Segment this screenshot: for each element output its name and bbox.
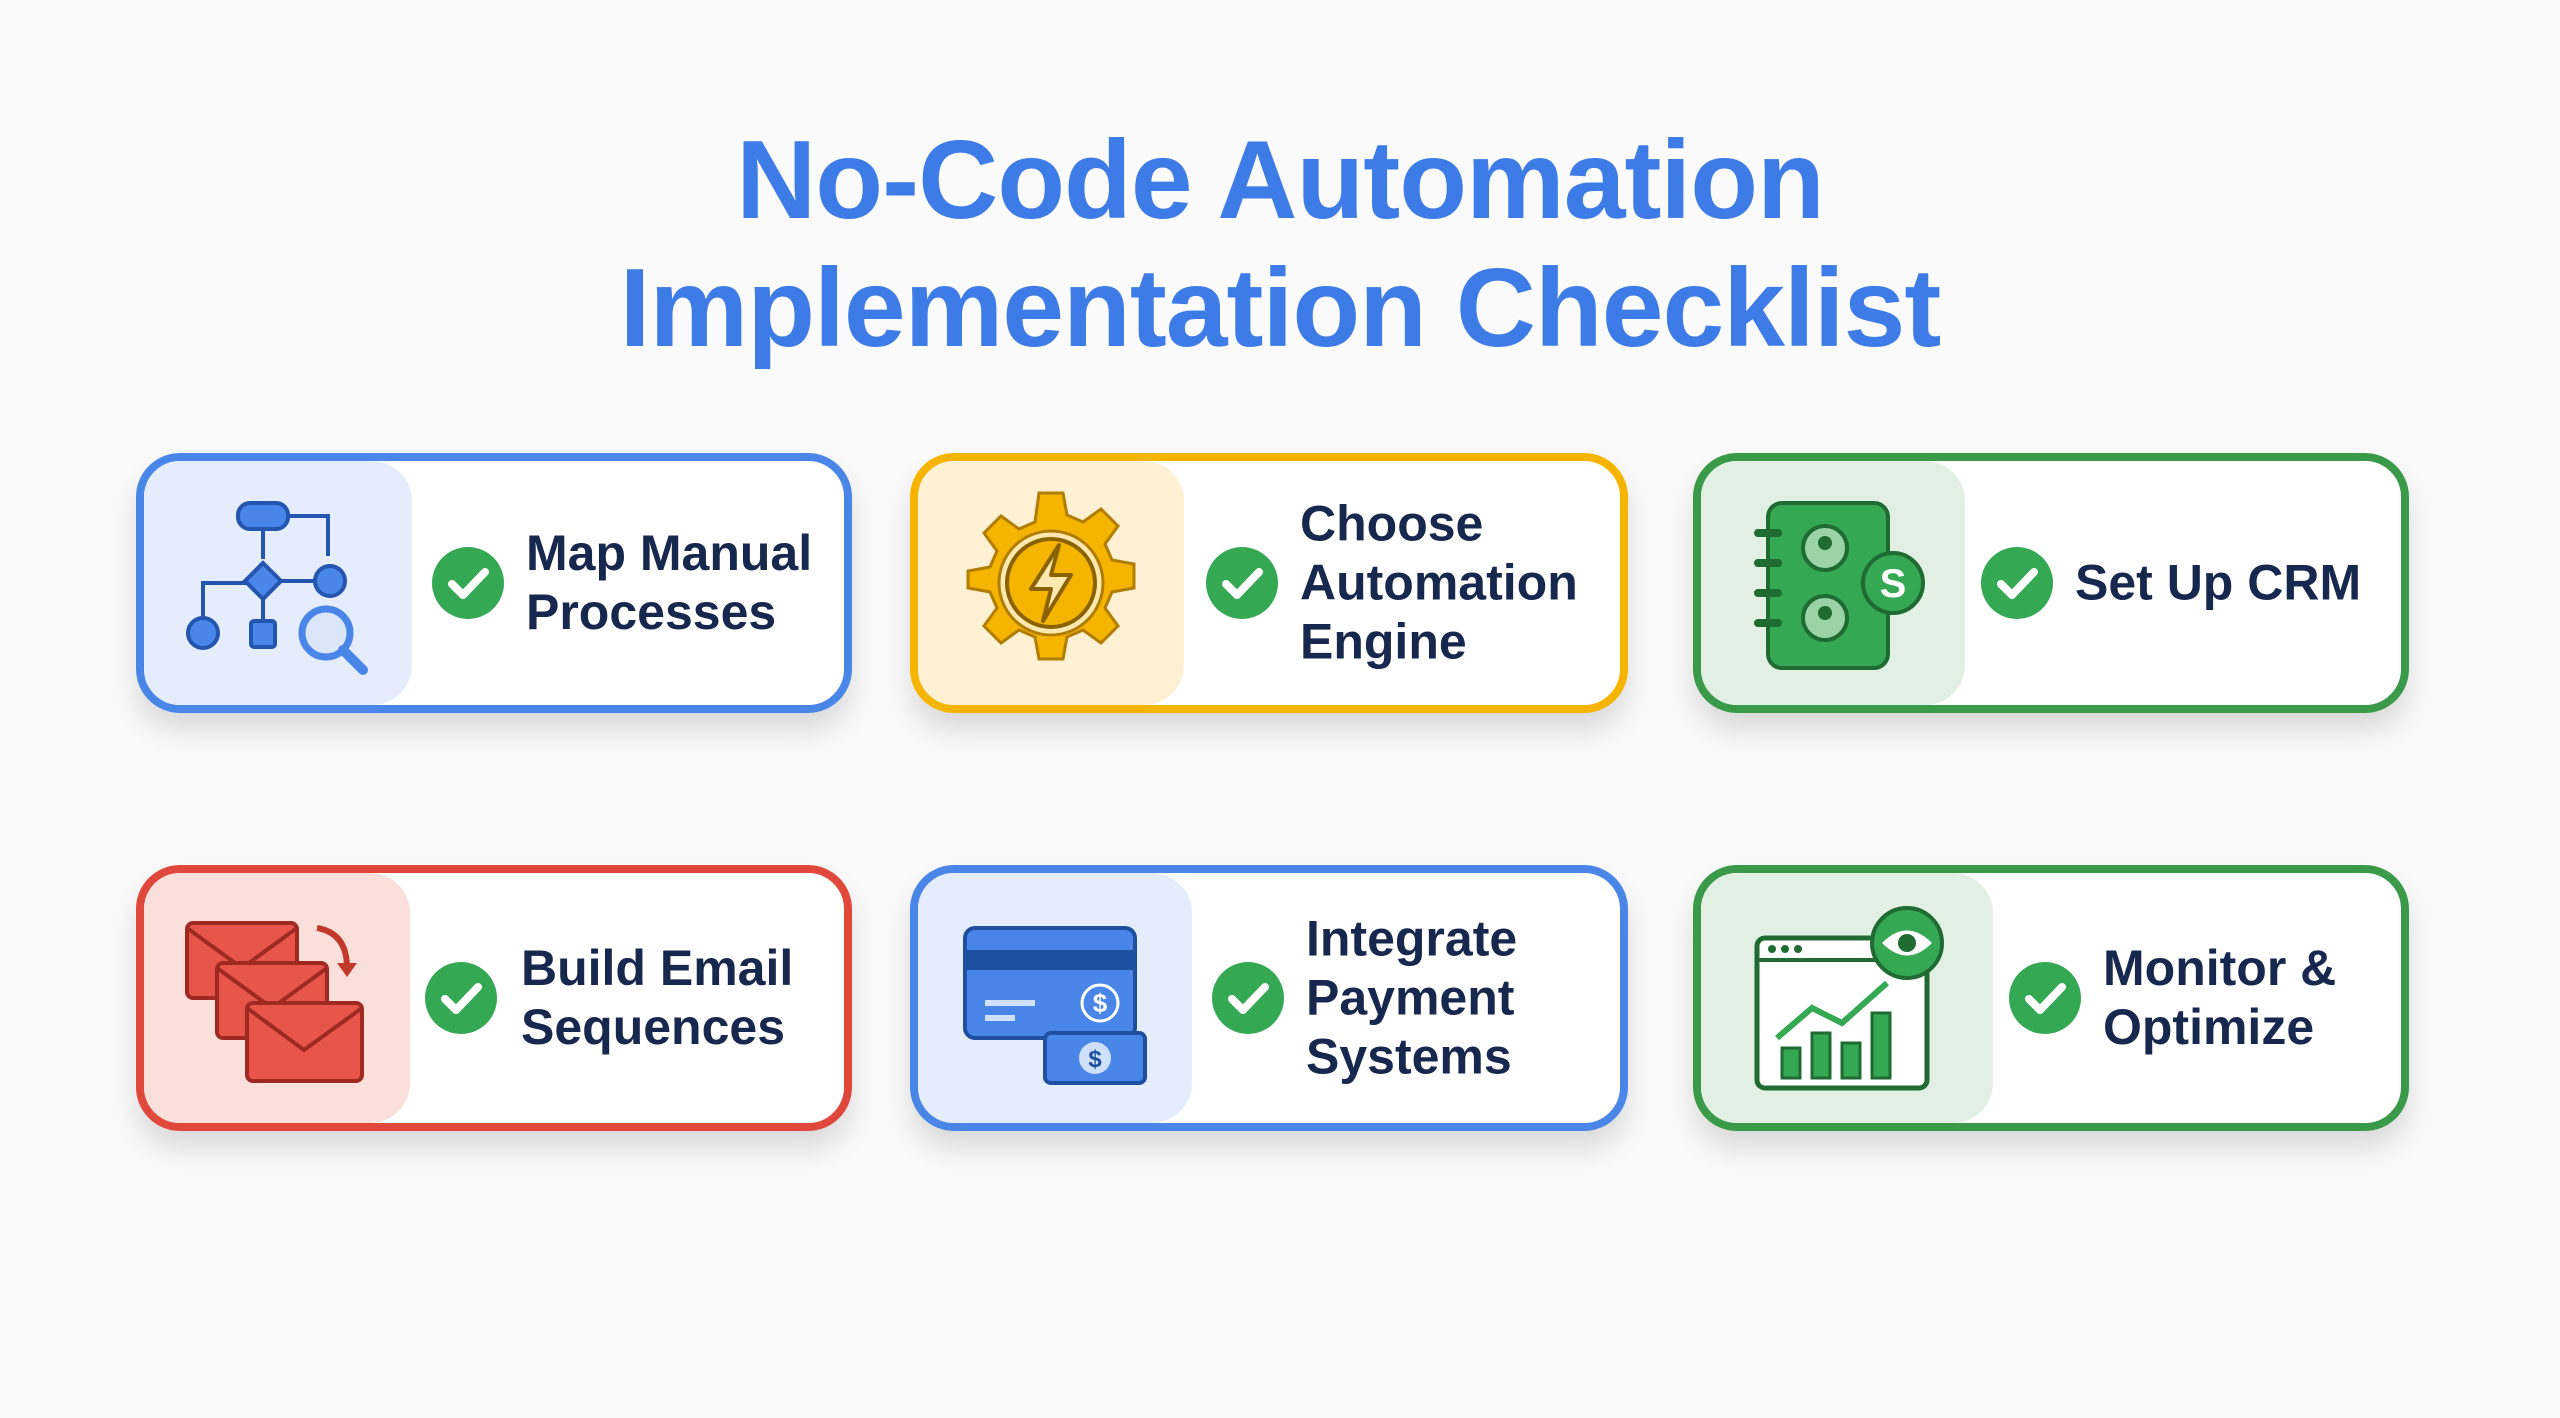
text: Map Manual: [526, 525, 812, 581]
check: [432, 547, 504, 619]
text: Monitor &: [2103, 940, 2336, 996]
icon: chart with eye: [1701, 873, 1993, 1123]
card: Build Email Sequences: [136, 865, 852, 1131]
title: No-Code Automation: [736, 118, 1824, 242]
title: Implementation Checklist: [620, 246, 1940, 370]
icon: CRM book: S: [1880, 562, 1906, 606]
text: Systems: [1306, 1028, 1512, 1084]
card: Map Manual Processes: [136, 453, 852, 713]
text: Sequences: [521, 999, 785, 1055]
text: Choose: [1300, 496, 1483, 552]
check: [1212, 962, 1284, 1034]
text: Integrate: [1306, 910, 1517, 966]
text: [521, 940, 793, 1055]
text: Set Up CRM: [2075, 554, 2361, 610]
text: [1300, 496, 1578, 670]
text: [1306, 910, 1517, 1084]
text: Optimize: [2103, 999, 2314, 1055]
icon: flowchart: [144, 461, 412, 705]
check: [1981, 547, 2053, 619]
icon: card and money: $: [1088, 1046, 1102, 1073]
icon: gear bolt: [918, 461, 1184, 705]
text: Payment: [1306, 970, 1514, 1026]
icon: CRM book: [1701, 461, 1965, 705]
text: Engine: [1300, 614, 1467, 670]
card: Choose Automation Engine: [910, 453, 1628, 713]
text: [2103, 940, 2336, 1055]
title: [620, 118, 1940, 370]
check: [2009, 962, 2081, 1034]
card: Set Up CRM: [1693, 453, 2409, 713]
check: [1206, 547, 1278, 619]
check: [425, 962, 497, 1034]
icon: card and money: [918, 873, 1192, 1123]
icon: card and money: $: [1093, 988, 1108, 1018]
text: Build Email: [521, 940, 793, 996]
text: Processes: [526, 584, 776, 640]
card: Integrate Payment Systems: [910, 865, 1628, 1131]
text: [526, 525, 812, 640]
icon: emails: [144, 873, 410, 1123]
text: Automation: [1300, 554, 1578, 610]
card: Monitor & Optimize: [1693, 865, 2409, 1131]
